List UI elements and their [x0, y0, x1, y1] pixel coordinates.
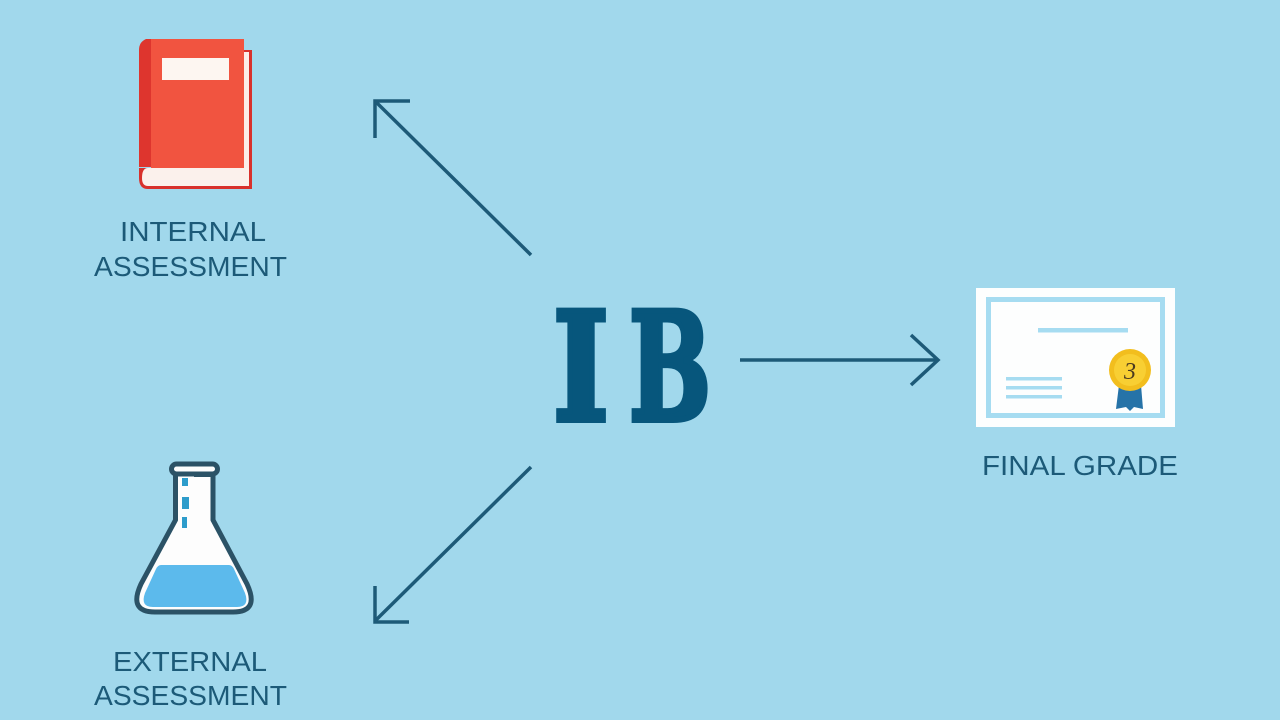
icon: flask: [137, 464, 251, 612]
label: final grade: FINAL GRADE: [982, 450, 1178, 481]
label: internal assessment: ASSESSMENT: [94, 251, 287, 282]
label: external assessment: EXTERNAL: [113, 646, 267, 677]
icon: certificate: 3: [1123, 359, 1136, 385]
icon: certificate: [976, 288, 1175, 427]
IB logo: B: [629, 280, 711, 456]
label: internal assessment: [94, 216, 287, 282]
label: internal assessment: INTERNAL: [120, 216, 266, 247]
arrow: to external assessment: [375, 467, 531, 622]
label: external assessment: ASSESSMENT: [94, 680, 287, 711]
icon: red book: [139, 39, 252, 189]
IB logo: I: [553, 280, 609, 456]
label: external assessment: [94, 646, 287, 711]
IB logo: [553, 280, 711, 456]
arrow: to internal assessment: [375, 101, 531, 255]
arrow: to final grade: [740, 335, 938, 385]
